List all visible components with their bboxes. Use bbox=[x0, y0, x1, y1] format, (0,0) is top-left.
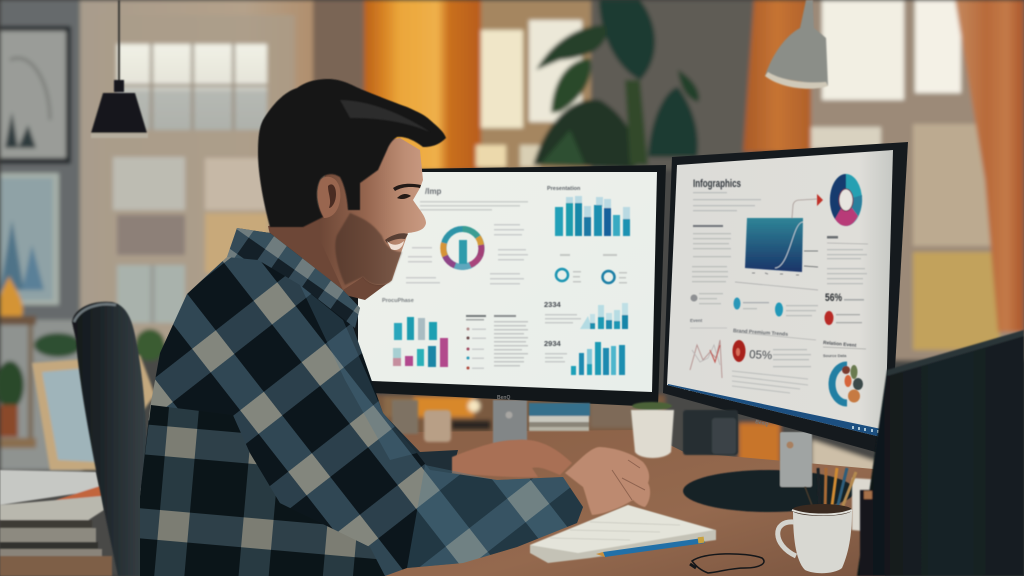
section text left bbox=[692, 225, 731, 282]
picture frame on shelf bbox=[32, 355, 155, 470]
screen bbox=[358, 172, 657, 392]
bezel bbox=[343, 165, 666, 407]
intro text lines bbox=[420, 201, 528, 211]
paper on desk bbox=[852, 478, 884, 533]
left window bbox=[80, 0, 316, 345]
taskbar bbox=[667, 384, 886, 438]
left screen content bbox=[382, 186, 630, 375]
torso bbox=[140, 228, 417, 576]
right monitor bbox=[663, 142, 908, 456]
back wall bbox=[591, 0, 754, 170]
rule bbox=[733, 332, 816, 340]
05% stat: 05% bbox=[749, 349, 772, 362]
right section text bbox=[827, 236, 868, 284]
56% stat: 56% bbox=[825, 292, 842, 304]
right lower heading: Relation Event bbox=[823, 340, 857, 349]
red icon small bbox=[824, 311, 862, 325]
rule bbox=[823, 347, 866, 349]
stack of books bbox=[0, 470, 112, 576]
bottom right bars bbox=[571, 342, 625, 375]
middle right stat: 2334 bbox=[544, 300, 562, 309]
area chart bbox=[745, 218, 803, 275]
foreground dark monitor bbox=[857, 330, 1024, 576]
donut labels bbox=[406, 224, 528, 284]
bottom right stat: 2934 bbox=[544, 339, 562, 348]
title: Infographics bbox=[693, 178, 741, 190]
glasses bbox=[690, 554, 764, 573]
glass objects on desk bbox=[392, 400, 451, 442]
far sleeve bbox=[372, 405, 458, 480]
pen bbox=[596, 537, 705, 557]
far hand bbox=[452, 440, 572, 477]
donut chart bbox=[443, 229, 482, 267]
bottom left bar chart bbox=[393, 317, 448, 367]
lower torso bbox=[140, 405, 385, 576]
pendant lamp left bbox=[91, 0, 148, 138]
left monitor bbox=[343, 165, 666, 447]
bottom centre paragraph bbox=[494, 315, 528, 366]
blue icon two bbox=[775, 302, 818, 316]
divider rule bbox=[735, 282, 818, 290]
lower chart label: Source Data bbox=[823, 353, 847, 358]
notebook bbox=[530, 505, 716, 563]
bottom centre legend bbox=[466, 315, 486, 370]
brand: BenQ bbox=[497, 395, 510, 401]
inner ear bbox=[328, 184, 336, 208]
blue icon one bbox=[734, 298, 769, 310]
top right heading: Presentation bbox=[547, 186, 581, 192]
wall and curtain centre bbox=[313, 0, 368, 200]
cream ledge behind right stand bbox=[812, 440, 886, 480]
donut centre bar bbox=[459, 240, 467, 264]
colourful donut bbox=[832, 365, 863, 403]
coffee mug bbox=[778, 504, 852, 573]
bezel bbox=[663, 142, 908, 456]
desk speakers bbox=[683, 410, 738, 455]
gear icon bbox=[690, 293, 723, 304]
56% caption bbox=[844, 299, 864, 301]
right stat text bbox=[545, 314, 581, 362]
small ring left bbox=[556, 269, 568, 281]
intro lines bbox=[693, 192, 761, 211]
pendant lamp right bbox=[765, 0, 828, 89]
smile bbox=[387, 241, 404, 250]
eyebrow bbox=[393, 184, 421, 191]
collar bbox=[227, 228, 360, 328]
chart connector lines bbox=[804, 251, 818, 267]
screen bbox=[667, 150, 893, 438]
background objects under the monitors bbox=[375, 395, 665, 435]
heading: /Imp bbox=[425, 187, 442, 196]
man bbox=[140, 79, 650, 576]
sheer curtain bbox=[955, 0, 1024, 332]
pictures on wall bbox=[0, 26, 71, 305]
hair bbox=[258, 79, 446, 227]
orange curtain right bbox=[743, 0, 811, 152]
ear bbox=[317, 177, 340, 218]
bottom left heading: ProcuPhase bbox=[382, 298, 414, 304]
eye bbox=[397, 194, 411, 199]
neck bbox=[268, 215, 392, 300]
stubble bbox=[335, 213, 402, 285]
shoulder blue tint bbox=[300, 285, 417, 460]
bottom paragraph bbox=[732, 371, 808, 393]
face bbox=[318, 138, 426, 290]
office chair bbox=[72, 302, 152, 576]
donut chart right bbox=[830, 174, 862, 226]
near sleeve bbox=[233, 285, 583, 568]
sleeve blue tint bbox=[407, 465, 583, 568]
moustache bbox=[385, 233, 408, 243]
middle heading: Brand Premium Trends bbox=[733, 328, 788, 338]
brand: BenQ bbox=[755, 419, 769, 428]
pencils bbox=[805, 468, 856, 513]
hair highlight bbox=[340, 100, 430, 132]
centre window bbox=[476, 0, 593, 170]
potted plant pot bbox=[631, 402, 674, 458]
right window bbox=[811, 0, 1024, 360]
arrow to donut bbox=[792, 194, 823, 218]
line chart bbox=[690, 318, 727, 378]
red icon large bbox=[732, 340, 746, 362]
left wall bbox=[0, 0, 82, 470]
desk bbox=[370, 430, 885, 576]
vase and shelf bbox=[0, 276, 23, 316]
top right bar chart bbox=[555, 196, 630, 236]
line chart: Event bbox=[690, 318, 703, 323]
right monitor stand bbox=[683, 432, 855, 512]
near hand bbox=[565, 447, 650, 515]
small ring right bbox=[602, 271, 614, 283]
ring labels bbox=[560, 254, 627, 284]
stand bbox=[493, 400, 527, 447]
plant bbox=[533, 0, 699, 168]
finger shadows bbox=[612, 460, 645, 500]
red stat text bbox=[773, 349, 811, 367]
books behind bbox=[529, 403, 590, 431]
right screen content bbox=[667, 174, 886, 438]
middle right bars bbox=[580, 303, 628, 329]
